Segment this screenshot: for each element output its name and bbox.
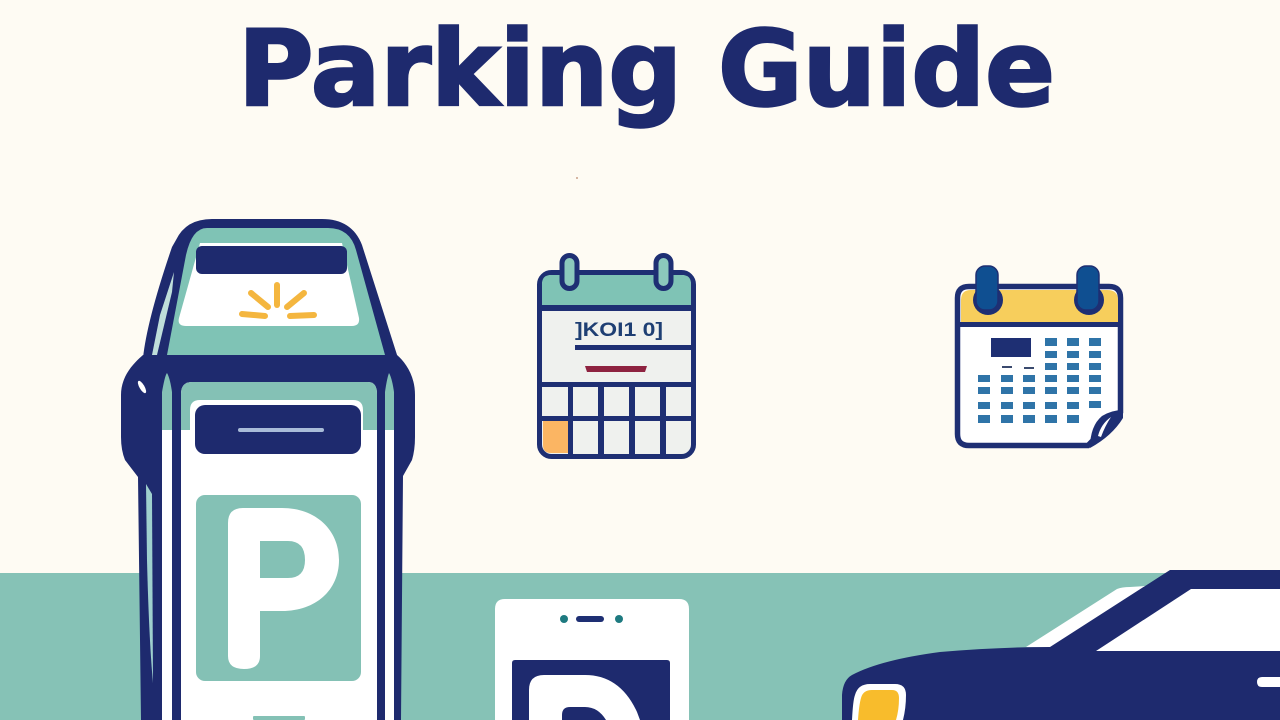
navy app tile <box>512 660 670 720</box>
ground band <box>0 573 1280 720</box>
speck <box>576 177 578 179</box>
headlight surround <box>852 684 906 720</box>
page curl <box>1090 410 1123 448</box>
camera dot right <box>615 615 623 623</box>
ring base right <box>1074 285 1104 315</box>
headlight <box>858 690 899 720</box>
calendar teal header <box>542 275 691 307</box>
yellow header <box>961 290 1118 322</box>
calendar icon left <box>539 256 694 456</box>
weekday dashes <box>1002 366 1034 369</box>
meter display window <box>179 243 359 326</box>
highlight on lobe <box>136 380 148 394</box>
left ring <box>976 266 998 310</box>
letter P <box>228 508 339 669</box>
meter body outline with side lobes <box>121 355 415 720</box>
calendar body <box>540 272 694 456</box>
door handle <box>1257 677 1280 687</box>
calendar label: ]KOI1 0] <box>575 320 663 341</box>
coin slot panel <box>195 405 361 454</box>
highlight on head <box>152 272 174 355</box>
meter head outline <box>143 219 398 358</box>
speaker pill <box>576 616 604 622</box>
lower slot <box>253 716 305 720</box>
coin slot line <box>238 428 324 432</box>
letter P on tile <box>529 675 640 720</box>
meter display bar <box>196 246 347 274</box>
car body <box>842 570 1280 720</box>
calendar sheet <box>958 286 1120 446</box>
teal strip top left <box>162 373 172 430</box>
red rule <box>585 366 647 372</box>
right ring <box>656 256 671 288</box>
left ring <box>562 256 577 288</box>
car <box>842 570 1280 720</box>
meter outer strip left <box>162 430 172 720</box>
date squares <box>978 338 1101 423</box>
parking sign square <box>196 495 361 681</box>
header divider <box>539 305 694 311</box>
meter outer strip right <box>385 430 394 720</box>
teal strip top right <box>385 373 394 430</box>
teal top of front panel <box>181 382 377 430</box>
phone with parking app <box>495 599 689 720</box>
date grid <box>539 382 694 455</box>
right ring <box>1077 266 1099 310</box>
phone body <box>495 599 689 720</box>
camera dot left <box>560 615 568 623</box>
calendar icon right <box>957 266 1123 448</box>
header divider <box>957 322 1121 327</box>
car window <box>1096 589 1280 651</box>
month block <box>991 338 1031 357</box>
navy rule <box>575 345 693 350</box>
highlighted date <box>543 421 568 453</box>
windshield reflection strip <box>1026 586 1146 648</box>
curl highlight <box>1098 417 1111 437</box>
title: Parking Guide <box>238 8 1055 130</box>
ring base left <box>973 285 1003 315</box>
highlight sliver left <box>146 484 153 683</box>
meter head teal face <box>167 228 385 355</box>
parking meter <box>121 219 415 720</box>
icon: sunburst <box>242 285 314 316</box>
meter front panel <box>181 382 377 720</box>
